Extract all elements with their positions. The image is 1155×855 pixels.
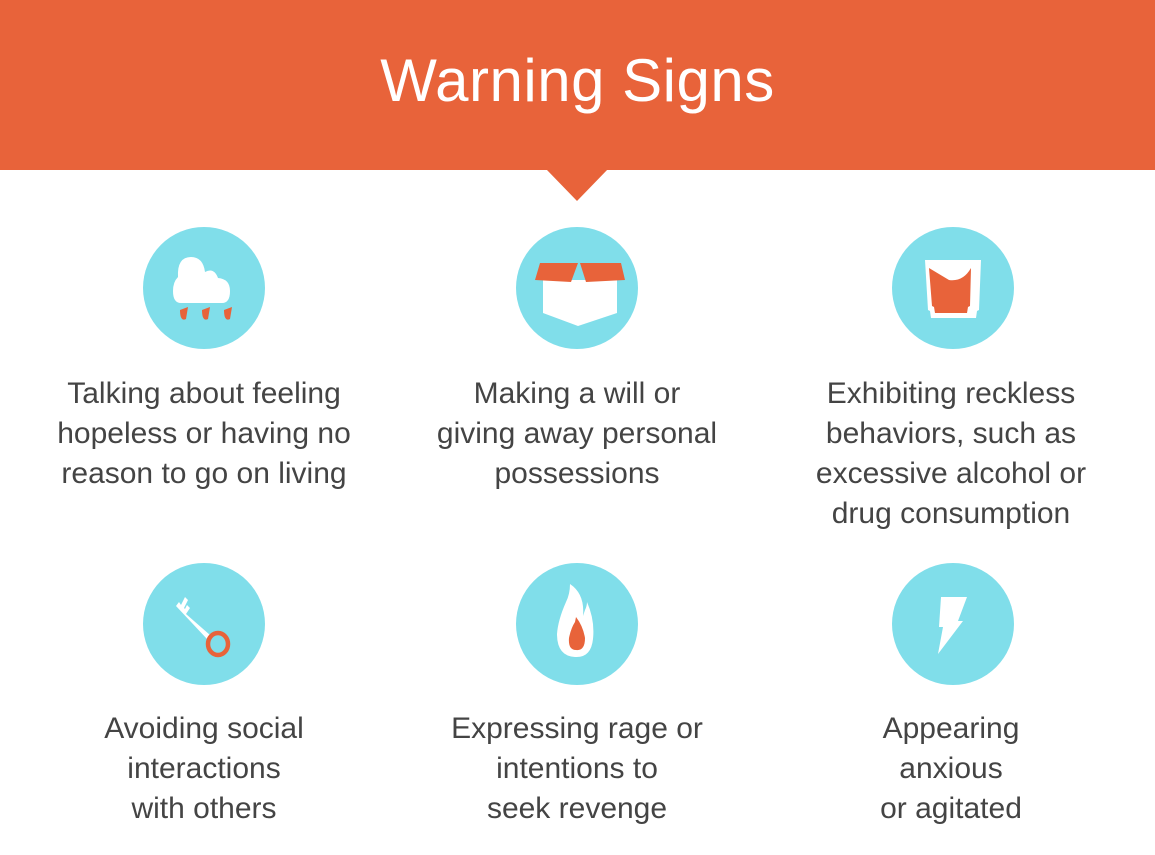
icon: lightning bolt: [892, 563, 1014, 685]
icon: open box: [516, 227, 638, 349]
text: will: Making a will or: [474, 377, 680, 410]
text: rage: seek revenge: [487, 792, 667, 825]
icon: rain cloud: [143, 227, 265, 349]
text: social: Avoiding social: [104, 712, 304, 745]
text: reckless: behaviors, such as: [826, 417, 1076, 450]
text: rage: intentions to: [496, 752, 658, 785]
text: reckless: excessive alcohol or: [816, 457, 1086, 490]
text: hopeless: [57, 377, 351, 490]
text: anxious: or agitated: [880, 792, 1022, 825]
text: will: possessions: [494, 457, 660, 490]
text: hopeless: reason to go on living: [61, 457, 347, 490]
text: social: with others: [131, 792, 277, 825]
text: reckless: [816, 377, 1086, 530]
header banner: [0, 0, 1155, 170]
text: anxious: Appearing: [883, 712, 1019, 745]
text: will: giving away personal: [437, 417, 717, 450]
text: reckless: drug consumption: [832, 497, 1070, 530]
text: hopeless: Talking about feeling: [67, 377, 341, 410]
text: social: [104, 712, 304, 825]
text: will: [437, 377, 717, 490]
icon: glass: [892, 227, 1014, 349]
text: rage: Expressing rage or: [451, 712, 703, 745]
text: hopeless: hopeless or having no: [57, 417, 351, 450]
title: Warning Signs: [380, 47, 775, 114]
header pointer arrow: [546, 169, 608, 201]
icon: flame: [516, 563, 638, 685]
text: reckless: Exhibiting reckless: [827, 377, 1075, 410]
text: social: interactions: [127, 752, 281, 785]
text: anxious: [880, 712, 1022, 825]
text: rage: [451, 712, 703, 825]
text: anxious: anxious: [899, 752, 1003, 785]
icon: key: [143, 563, 265, 685]
